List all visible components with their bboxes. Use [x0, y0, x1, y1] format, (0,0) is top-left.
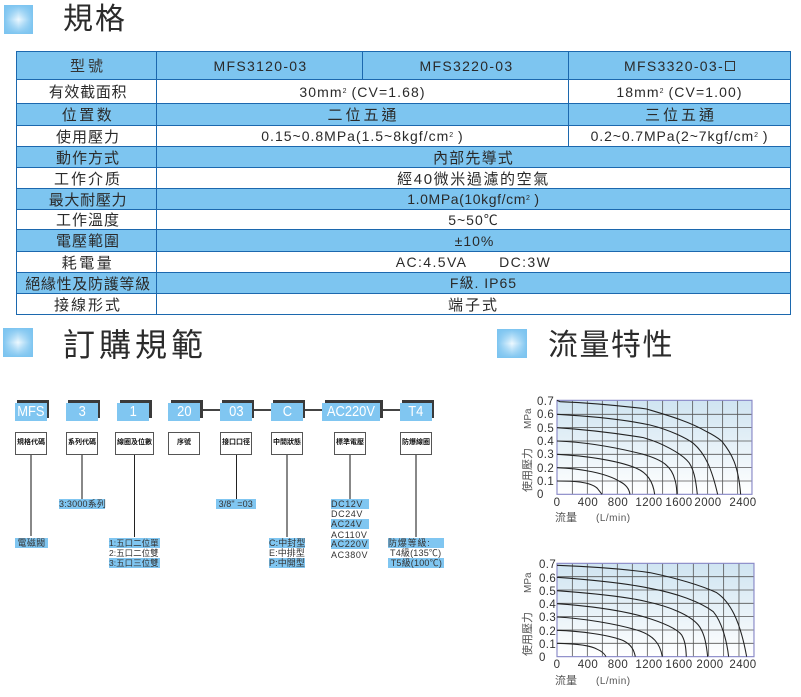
x axis values: 0	[554, 497, 560, 509]
code: serial number: 20	[177, 403, 191, 420]
code: explosion-proof coil: 防爆等級:	[388, 538, 431, 548]
row: power consumption: 耗電量	[62, 254, 114, 272]
chart: flow curve bottom	[521, 559, 757, 687]
axis titles: MPa	[523, 408, 534, 429]
row: working pressure: 使用壓力	[56, 128, 120, 146]
row: effective area: 30mm (CV=1.68)	[299, 84, 426, 100]
row: insulation: 絕緣性及防護等級	[25, 276, 151, 292]
row: voltage range: ±10%	[455, 232, 494, 248]
row: wiring: 端子式	[448, 296, 499, 314]
code: solenoid positions	[109, 400, 160, 568]
row: temperature	[16, 210, 791, 229]
x axis values: 1200	[635, 497, 663, 509]
code: port size: 3/8" =03	[219, 499, 253, 509]
row: insulation	[16, 273, 791, 293]
y axis values: 0.7	[539, 559, 556, 571]
row: model	[16, 51, 791, 79]
code: explosion-proof coil: 防爆線圈	[402, 439, 430, 446]
row: working pressure: 0.15~0.8MPa(1.5~8kgf/cm )	[261, 128, 464, 144]
y axis values: 0.4	[537, 436, 554, 448]
x axis values: 2400	[729, 497, 757, 509]
code: solenoid positions: 2:五口二位雙	[109, 548, 159, 558]
row: max pressure: 最大耐壓力	[49, 192, 127, 208]
y axis values	[537, 396, 554, 501]
row: power consumption: AC:4.5VA DC:3W	[396, 254, 551, 270]
y axis values: 0.3	[539, 612, 556, 624]
y axis values: 0.6	[537, 409, 554, 421]
code: port size	[216, 400, 256, 509]
x axis values: 1600	[665, 659, 693, 671]
row: positions: 位置数	[62, 107, 114, 124]
code: standard voltage: DC12V	[331, 499, 363, 509]
row: effective area: 有效截面积	[49, 84, 127, 101]
y axis values: 0.1	[539, 639, 556, 651]
y axis values: 0.6	[539, 573, 556, 585]
row: positions	[16, 104, 791, 125]
axis titles: MPa	[523, 572, 534, 593]
code: series	[59, 400, 106, 509]
axis titles: 使用壓力	[521, 448, 534, 492]
code: center state: P:中開型	[269, 558, 305, 568]
x axis values: 1600	[665, 497, 693, 509]
code: standard voltage: AC24V	[331, 519, 363, 529]
code: series: 系列代碼	[68, 439, 96, 446]
x axis values: 800	[608, 497, 628, 509]
row: working pressure: 2	[449, 132, 453, 139]
y axis values: 0.4	[539, 599, 556, 611]
x axis values: 400	[578, 659, 598, 671]
row: max pressure: 2	[526, 195, 530, 202]
x axis values: 2000	[696, 659, 724, 671]
row: max pressure: 1.0MPa(10kgf/cm )	[407, 191, 540, 207]
code: standard voltage: 標準電壓	[336, 439, 364, 446]
row: insulation: F級. IP65	[450, 275, 517, 291]
code: explosion-proof coil: T5級(100℃)	[391, 558, 442, 568]
y axis values: 0.5	[537, 423, 554, 435]
row: wiring: 接線形式	[54, 296, 122, 314]
row: max pressure	[16, 189, 791, 209]
y axis values: 0.7	[537, 396, 554, 408]
row: working pressure: 0.2~0.7MPa(2~7kgf/cm )	[591, 128, 768, 144]
row: working pressure: 2	[754, 132, 758, 139]
code: standard voltage: AC380V	[331, 550, 368, 560]
axis titles: (L/min)	[596, 513, 631, 524]
x axis values	[554, 497, 757, 509]
axis titles	[521, 408, 631, 524]
row: medium	[16, 168, 791, 188]
row: operating mode: 內部先導式	[433, 150, 514, 166]
row: medium: 工作介质	[54, 170, 122, 188]
row: effective area	[16, 80, 791, 103]
code: standard voltage: DC24V	[331, 509, 363, 519]
ordering code diagram	[15, 400, 444, 568]
code: port size: 接口口徑	[222, 439, 250, 446]
y axis values: 0.5	[539, 586, 556, 598]
code: center state: E:中排型	[269, 548, 305, 558]
code: series: 3	[78, 403, 86, 420]
code: center state: 中間狀態	[273, 439, 301, 446]
code: center state: C	[282, 403, 292, 420]
row: medium: 經40微米過濾的空氣	[397, 170, 550, 188]
icon: ordering heading square	[3, 328, 33, 357]
code: standard voltage: AC220V	[331, 539, 368, 549]
row: voltage range: 電壓範圍	[56, 233, 120, 250]
axis titles: (L/min)	[596, 676, 631, 687]
heading: flow characteristics: 流量特性	[548, 329, 674, 362]
row: model: MFS3220-03	[420, 58, 513, 74]
x axis values: 1200	[635, 659, 663, 671]
row: power consumption	[16, 252, 791, 272]
row: model: 型號	[70, 58, 106, 75]
code: standard voltage	[322, 400, 383, 560]
row: positions: 三位五通	[645, 107, 717, 124]
row: positions: 二位五通	[327, 107, 400, 124]
x axis values: 400	[578, 497, 598, 509]
row: voltage range	[16, 230, 791, 251]
code: solenoid positions: 1	[129, 403, 137, 420]
code: MFS	[15, 400, 49, 548]
code: solenoid positions: 線圈及位數	[117, 439, 152, 446]
axis titles: 流量	[555, 510, 577, 524]
row: model: MFS3120-03	[214, 58, 307, 74]
row: operating mode	[16, 147, 791, 167]
specification table	[16, 51, 791, 315]
code: port size: 03	[229, 403, 243, 420]
code: explosion-proof coil	[388, 400, 444, 568]
row: temperature: 5~50℃	[448, 212, 499, 228]
code: serial number: 序號	[177, 439, 191, 446]
icon: flow heading square	[497, 329, 527, 358]
row: effective area: 2	[343, 88, 347, 94]
axis titles	[521, 572, 631, 687]
code: standard voltage: AC220V	[327, 403, 375, 420]
y axis values: 0.2	[539, 626, 556, 638]
code: MFS: 電磁閥	[18, 538, 45, 548]
axis titles: 流量	[555, 673, 577, 687]
axis titles: 使用壓力	[521, 612, 534, 656]
code: solenoid positions: 3:五口三位雙	[109, 558, 159, 568]
icon: specification heading square	[4, 5, 33, 34]
x axis values: 0	[554, 659, 560, 671]
heading: specifications: 規格	[63, 3, 127, 36]
code connectors	[203, 409, 400, 411]
y axis values	[539, 559, 556, 664]
row: effective area: 2	[660, 88, 664, 94]
heading: ordering code: 訂購規範	[63, 327, 207, 363]
y axis values: 0	[539, 652, 546, 664]
row: working pressure	[16, 126, 791, 146]
y axis values: 0.1	[537, 476, 554, 488]
code: MFS: MFS	[17, 403, 45, 420]
code: MFS: 規格代碼	[17, 439, 45, 446]
x axis values: 800	[608, 659, 628, 671]
row: wiring	[16, 294, 791, 315]
y axis values: 0.3	[537, 449, 554, 461]
x axis values	[554, 659, 757, 671]
row: temperature: 工作溫度	[56, 212, 120, 229]
row: model: MFS3320-03-	[624, 58, 724, 74]
y axis values: 0.2	[537, 463, 554, 475]
code: center state	[269, 400, 306, 568]
code: series: 3:3000系列	[59, 499, 106, 509]
chart: flow curve top	[521, 396, 757, 524]
code: explosion-proof coil: T4	[408, 403, 424, 420]
code: solenoid positions: 1:五口二位單	[109, 538, 159, 548]
code: center state: C:中封型	[269, 538, 306, 548]
code: serial number	[168, 400, 203, 455]
code: standard voltage: AC110V	[331, 530, 367, 540]
y axis values: 0	[537, 489, 544, 501]
x axis values: 2400	[729, 659, 757, 671]
row: effective area: 18mm (CV=1.00)	[616, 84, 743, 100]
code: explosion-proof coil: T4級(135℃)	[390, 548, 441, 558]
x axis values: 2000	[694, 497, 722, 509]
row: operating mode: 動作方式	[56, 150, 120, 166]
